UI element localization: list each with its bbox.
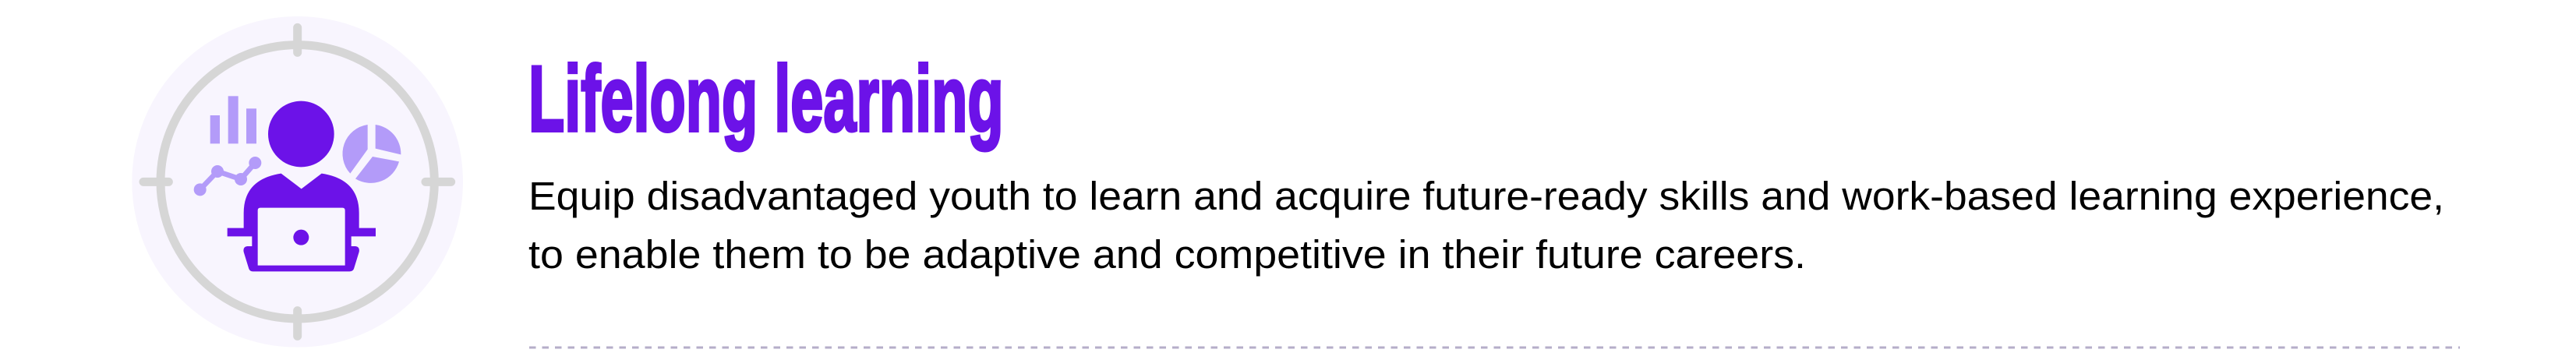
heading: Lifelong learning	[528, 46, 1004, 150]
icon: bar chart	[210, 96, 256, 143]
icon: person with laptop	[228, 101, 376, 271]
icon background disc	[132, 16, 463, 348]
target ring with ticks	[143, 27, 451, 336]
icon: line chart	[194, 157, 261, 196]
body text: Equip disadvantaged youth to learn and acquire future-ready skills and work-based learning experience,	[528, 174, 2444, 218]
icon: pie chart	[342, 125, 401, 183]
dashed divider	[529, 346, 2460, 349]
body text: to enable them to be adaptive and competitive in their future careers.	[528, 232, 1806, 277]
body text	[528, 174, 2444, 277]
icon: person at laptop in target ring	[132, 16, 463, 348]
